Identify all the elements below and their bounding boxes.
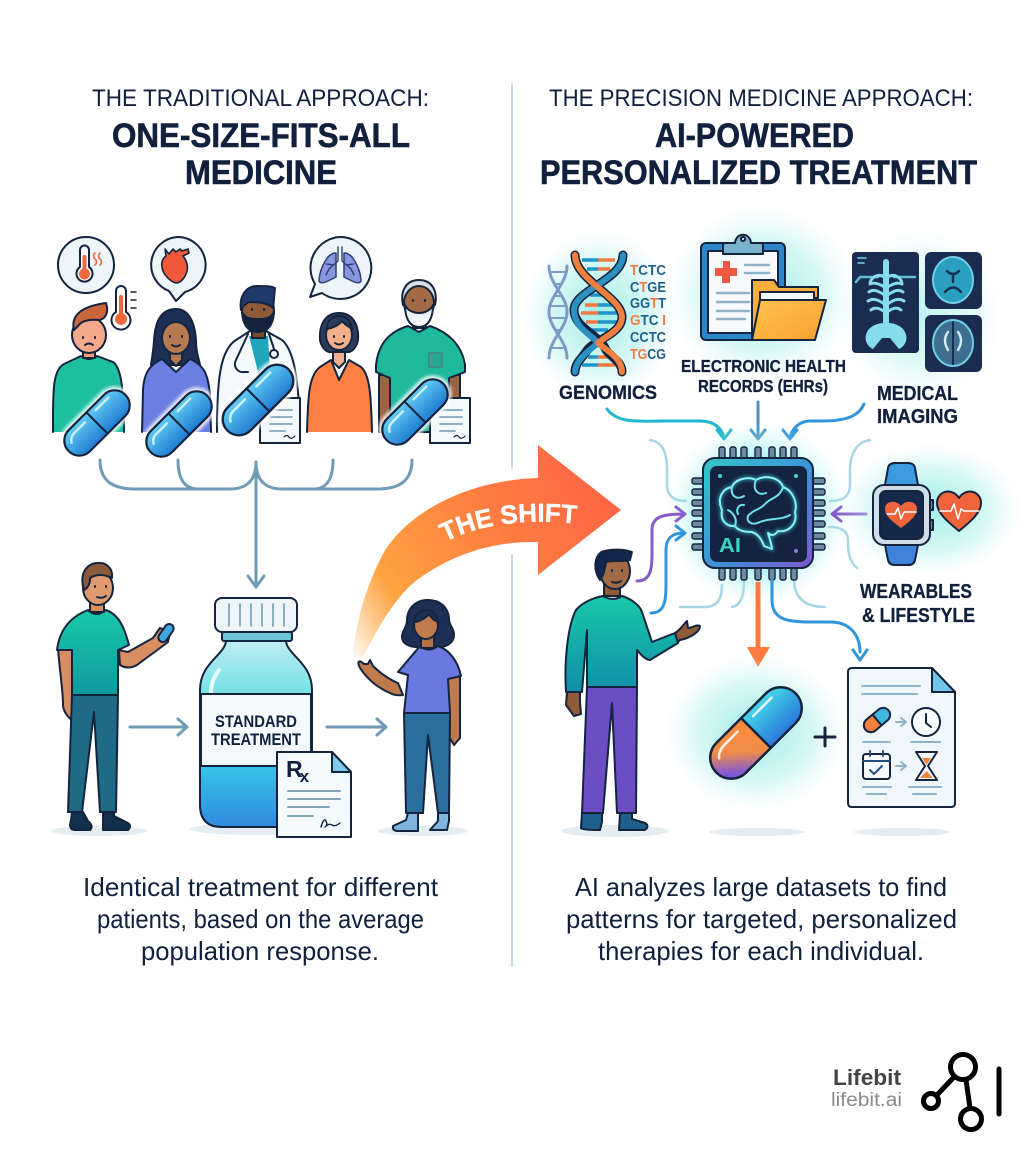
sequence letters: CTGE [630, 280, 666, 296]
caption: traditional approach [83, 872, 439, 966]
caption: traditional approach: patients, based on the average [97, 904, 424, 934]
arrow: genomics [607, 409, 731, 439]
soft glows [522, 207, 1002, 400]
icon: electronic health record clipboard and folder [701, 235, 826, 340]
label text: TREATMENT [211, 731, 301, 749]
strands [574, 255, 623, 372]
icon: heart bubble [151, 237, 206, 301]
patient 2: woman with long hair [142, 309, 211, 432]
label: medical imaging: IMAGING [877, 406, 958, 428]
panel: symptom bubbles [58, 237, 371, 330]
document 3 [260, 398, 300, 443]
icon: thermometer bubble [58, 237, 114, 293]
arrow: bottle to patient [327, 719, 386, 735]
heading: traditional approach: MEDICINE [185, 154, 337, 192]
document 5 [430, 398, 470, 443]
calendar [863, 751, 890, 779]
label: electronic health records: RECORDS (EHRs) [698, 376, 828, 396]
brain scan bottom [925, 315, 982, 372]
label: wearables and lifestyle: WEARABLES [860, 581, 972, 603]
caption: precision medicine approach: therapies for each individual. [598, 936, 924, 966]
sequence letters: GGTT [630, 296, 666, 312]
caption: precision medicine approach: AI analyzes large datasets to find [575, 872, 947, 902]
heading: precision medicine approach: AI-POWERED [655, 117, 854, 155]
caption: traditional approach: Identical treatment for different [83, 872, 439, 902]
label text: STANDARD [215, 713, 297, 731]
logo: Lifebit: lifebit.ai [831, 1090, 902, 1111]
x-ray [852, 252, 919, 353]
capsule 5 [370, 367, 460, 457]
logo: Lifebit [831, 1054, 999, 1130]
logo: Lifebit: Lifebit [833, 1065, 902, 1090]
icon: lungs bubble [310, 237, 371, 299]
plus sign [815, 728, 835, 746]
arrow: the shift [353, 445, 621, 658]
label: medical imaging [877, 383, 958, 428]
label: wearables and lifestyle: & LIFESTYLE [862, 605, 975, 627]
label: electronic health records [681, 356, 846, 396]
heading: precision medicine approach: THE PRECISION MEDICINE APPROACH: [549, 85, 973, 112]
sequence letters: TGCG [630, 347, 666, 363]
arrow: patient to bottle [130, 719, 187, 735]
patient 5: older man with beard [376, 280, 465, 432]
icon: personalized capsule [664, 655, 848, 836]
label: genomics: GENOMICS [559, 382, 657, 404]
icon: AI chip with brain [666, 421, 850, 605]
icon: side thermometer [112, 286, 136, 330]
hourglass [916, 752, 937, 780]
caption: precision medicine approach: patterns for targeted, personalized [566, 904, 957, 934]
arrow: into bottle [248, 576, 264, 587]
capsule 1 [52, 378, 142, 468]
heading: traditional approach [92, 85, 429, 192]
document: personalized treatment plan [848, 668, 955, 836]
clock [912, 708, 940, 736]
arrow: wearable into chip [832, 507, 866, 521]
capsule 3 [210, 352, 306, 448]
small faded helix [549, 266, 567, 358]
panel: five patients [53, 280, 465, 432]
icon: dna genomics [549, 255, 666, 372]
sequence letters: CCTC [630, 330, 666, 346]
arrow: patient blue [651, 526, 685, 613]
heading: precision medicine approach: PERSONALIZED TREATMENT [540, 154, 977, 192]
heading: traditional approach: ONE-SIZE-FITS-ALL [112, 117, 410, 155]
arrow: health records [751, 402, 765, 439]
person: patient in teal with AI [561, 550, 700, 837]
capsules held by each patient [52, 352, 470, 469]
arrow: chip to treatment plan [772, 580, 867, 660]
person: man with pill [51, 563, 175, 836]
arrows: lifestyle and patient inputs [637, 507, 866, 613]
icon: AI chip with brain: AI [719, 535, 741, 557]
caption: traditional approach: population response. [141, 936, 379, 966]
patient 3: doctor [217, 286, 300, 432]
bottle: standard treatment [190, 598, 351, 837]
capsule 2 [134, 379, 224, 469]
mini capsule [861, 705, 893, 735]
label: wearables and lifestyle [860, 581, 975, 627]
sequence letters: TCTC [630, 263, 666, 279]
icon: small blue pill [157, 622, 175, 644]
heading: precision medicine approach [540, 85, 977, 192]
label text [211, 713, 301, 749]
heading: traditional approach: THE TRADITIONAL APPROACH: [92, 85, 429, 112]
person: woman gesturing [358, 600, 468, 836]
faded circuit traces [650, 440, 870, 607]
sequence letters [630, 263, 666, 363]
prescription document: R [286, 756, 303, 782]
patient 4: woman in orange [307, 313, 372, 432]
arrows: data sources into chip [607, 402, 864, 439]
brain [720, 477, 796, 549]
chip pins [692, 447, 825, 580]
icon: smartwatch and heart [838, 444, 1022, 576]
caption: precision medicine approach [566, 872, 957, 966]
prescription document: x [300, 767, 310, 786]
label: electronic health records: ELECTRONIC HEALTH [681, 356, 846, 376]
arrow: imaging [783, 404, 864, 439]
panel: data sources [522, 207, 1002, 428]
merging bracket lines [100, 460, 412, 587]
icon: medical imaging x-ray and brain scans [852, 252, 982, 372]
central divider [511, 84, 513, 966]
arrow: patient purple [637, 507, 685, 581]
prescription document [277, 752, 351, 837]
base pair rungs [581, 260, 620, 365]
brain scan top [925, 252, 982, 309]
arrow: chip to personalized pill [747, 582, 770, 667]
patient 1: man with fever [53, 303, 124, 432]
label: medical imaging: MEDICAL [877, 383, 958, 405]
sequence letters: GTC I [630, 313, 666, 329]
arrow: the shift: THE SHIFT [438, 504, 578, 540]
